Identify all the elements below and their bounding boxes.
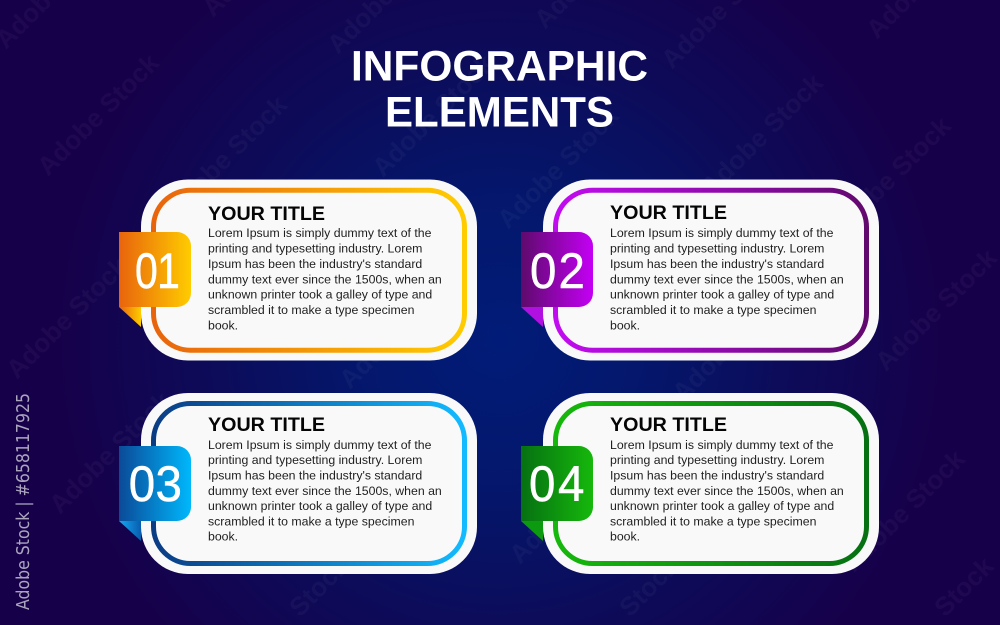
title	[351, 42, 648, 136]
card 01 body text: unknown printer took a galley of type and	[208, 288, 432, 302]
card 02 gradient outline	[556, 190, 866, 350]
card 01 body text: scrambled it to make a type specimen	[208, 303, 415, 317]
watermark pattern: Stock	[928, 551, 1000, 622]
watermark pattern: Adobe Stock	[43, 385, 177, 519]
card 04 gradient outline	[556, 404, 866, 564]
card 02 body text: book.	[610, 318, 640, 332]
panel: card 02	[521, 180, 879, 360]
card 03 body text: scrambled it to make a type specimen	[208, 514, 415, 528]
card 02 number tab: 02	[530, 244, 585, 299]
card 04 body text: unknown printer took a galley of type and	[610, 499, 834, 513]
title: INFOGRAPHIC	[351, 42, 648, 90]
card 03 body text	[208, 438, 442, 544]
card 03 heading: YOUR TITLE	[208, 414, 325, 436]
watermark pattern: Stock	[283, 551, 355, 622]
card 03 number tab	[119, 446, 191, 541]
watermark pattern: Adobe Stock	[366, 48, 500, 182]
card 04 number tab: 04	[529, 457, 584, 512]
card 01 number tab: 01	[135, 243, 180, 299]
card 02 body text	[610, 226, 844, 332]
card 02 white base	[543, 180, 879, 360]
watermark pattern: Adobe Stock	[31, 47, 165, 181]
card 04 body text: printing and typesetting industry. Lorem	[610, 453, 824, 467]
watermark pattern: Adobe Stock	[333, 260, 467, 394]
card 01 body text: printing and typesetting industry. Lorem	[208, 242, 422, 256]
card 02 body text: Lorem Ipsum is simply dummy text of the	[610, 226, 834, 240]
card 01 body text: book.	[208, 318, 238, 332]
watermark pattern: Adobe Stock	[491, 100, 625, 234]
card 03 body text: dummy text ever since the 1500s, when an	[208, 484, 442, 498]
watermark pattern: Adobe Stock	[0, 250, 134, 384]
watermark pattern: Adobe Stock	[503, 435, 637, 569]
panel: card 01	[119, 180, 477, 360]
watermark pattern: Adobe Stock	[837, 443, 971, 577]
card 02 heading: YOUR TITLE	[610, 202, 727, 224]
card 01 body text: dummy text ever since the 1500s, when an	[208, 272, 442, 286]
card 04 body text: book.	[610, 530, 640, 544]
card 03 body text: Ipsum has been the industry's standard	[208, 468, 422, 482]
card 03 body text: book.	[208, 530, 238, 544]
card 02 body text: unknown printer took a galley of type and	[610, 288, 834, 302]
panel: card 03	[119, 393, 477, 574]
card 01 heading: YOUR TITLE	[208, 203, 325, 225]
watermark pattern: Stock	[613, 551, 685, 622]
watermark pattern: Adobe Stock	[159, 89, 293, 223]
watermark pattern: Adobe Stock	[666, 273, 800, 407]
stock id side label: Adobe Stock | #658117925	[14, 393, 34, 610]
card 03 body text: Lorem Ipsum is simply dummy text of the	[208, 438, 432, 452]
card 01 body text: Lorem Ipsum is simply dummy text of the	[208, 226, 432, 240]
card 03 body text: unknown printer took a galley of type and	[208, 499, 432, 513]
card 04 body text	[610, 438, 844, 544]
card 01 body text	[208, 226, 442, 332]
card 02 body text: scrambled it to make a type specimen	[610, 303, 817, 317]
card 04 body text: scrambled it to make a type specimen	[610, 514, 817, 528]
card 04 body text: Ipsum has been the industry's standard	[610, 468, 824, 482]
card 04 white base	[543, 393, 879, 574]
card 04 body text: dummy text ever since the 1500s, when an	[610, 484, 844, 498]
card 01 white base	[141, 180, 477, 360]
card 03 body text: printing and typesetting industry. Lorem	[208, 453, 422, 467]
card 02 body text: dummy text ever since the 1500s, when an	[610, 272, 844, 286]
watermark pattern: Adobe Stock	[695, 67, 829, 201]
card 04 number tab	[521, 446, 593, 541]
card 01 gradient outline	[154, 190, 464, 350]
panel: card 04	[521, 393, 879, 574]
card 02 body text: printing and typesetting industry. Lorem	[610, 242, 824, 256]
watermark pattern: Adobe Stock	[823, 110, 957, 244]
card 01 number tab	[119, 232, 191, 327]
card 04 body text: Lorem Ipsum is simply dummy text of the	[610, 438, 834, 452]
card 03 white base	[141, 393, 477, 574]
card 02 number tab	[521, 232, 593, 327]
card 03 gradient outline	[154, 404, 464, 564]
card 02 body text: Ipsum has been the industry's standard	[610, 257, 824, 271]
watermark pattern: Adobe Stock	[869, 242, 1000, 376]
title: ELEMENTS	[385, 88, 614, 136]
card 03 number tab: 03	[129, 457, 182, 512]
card 01 body text: Ipsum has been the industry's standard	[208, 257, 422, 271]
card 04 heading: YOUR TITLE	[610, 414, 727, 436]
